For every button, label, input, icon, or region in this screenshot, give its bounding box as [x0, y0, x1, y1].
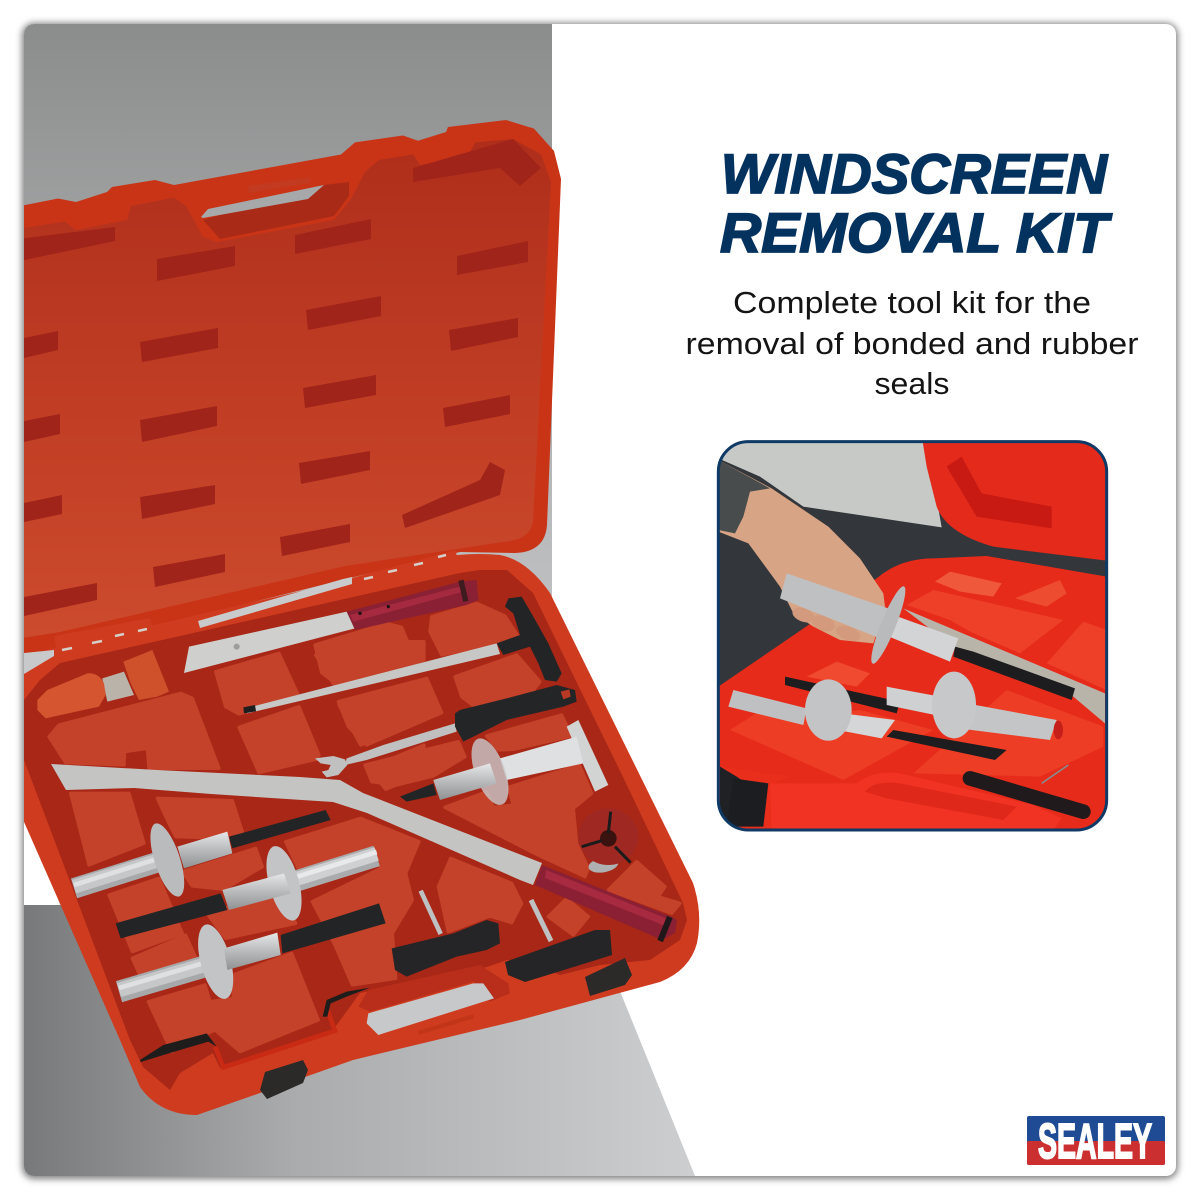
tool: T-bar handle with disc [400, 720, 608, 810]
black handle in photo [970, 765, 1083, 812]
lower left tool [728, 677, 1007, 760]
tool: round cutter puck [578, 808, 638, 875]
description text: removal of bonded and rubber [686, 326, 1138, 361]
raised foam block, bottom [148, 953, 318, 1052]
case latches [260, 958, 632, 1099]
description text: seals [874, 366, 950, 401]
description text: Complete tool kit for the [733, 285, 1091, 320]
tool: handled blade B [116, 842, 377, 938]
description text [686, 285, 1138, 401]
tool: wire handle right [505, 900, 612, 982]
base handle [358, 965, 510, 1035]
tool: T-handle rod [243, 597, 562, 713]
tool: long lever bar [51, 764, 677, 942]
tool: hook and channel [140, 988, 370, 1067]
title [720, 142, 1113, 264]
wall [718, 442, 942, 527]
raised foam blocks, left [49, 642, 424, 988]
raised foam blocks, right [315, 603, 680, 935]
lower right tool [887, 672, 1063, 740]
hinges and gap [54, 550, 458, 658]
inset border [718, 442, 1107, 830]
case base [10, 554, 699, 1115]
inset photo: tools in case [718, 442, 1107, 830]
title: REMOVAL KIT [720, 201, 1113, 264]
tool: flat blade with red handle [184, 580, 478, 673]
tool: handled blade C [119, 903, 386, 1003]
product photo: open tool case [10, 120, 699, 1115]
base in photo [718, 556, 1107, 830]
background panel: grey studio shapes [24, 24, 695, 1176]
tool: wire handle left [392, 891, 500, 977]
tool: black handle with wrench fork [315, 685, 577, 777]
lid slots [10, 139, 541, 616]
lid handle recess and opening [201, 177, 349, 239]
case lid [10, 120, 561, 655]
lid in photo [923, 442, 1107, 561]
tool: handled blade A [74, 810, 331, 900]
arm and hand [718, 460, 885, 644]
tool: orange scraper [37, 650, 169, 718]
title: WINDSCREEN [721, 142, 1109, 205]
held tool [780, 573, 1105, 723]
